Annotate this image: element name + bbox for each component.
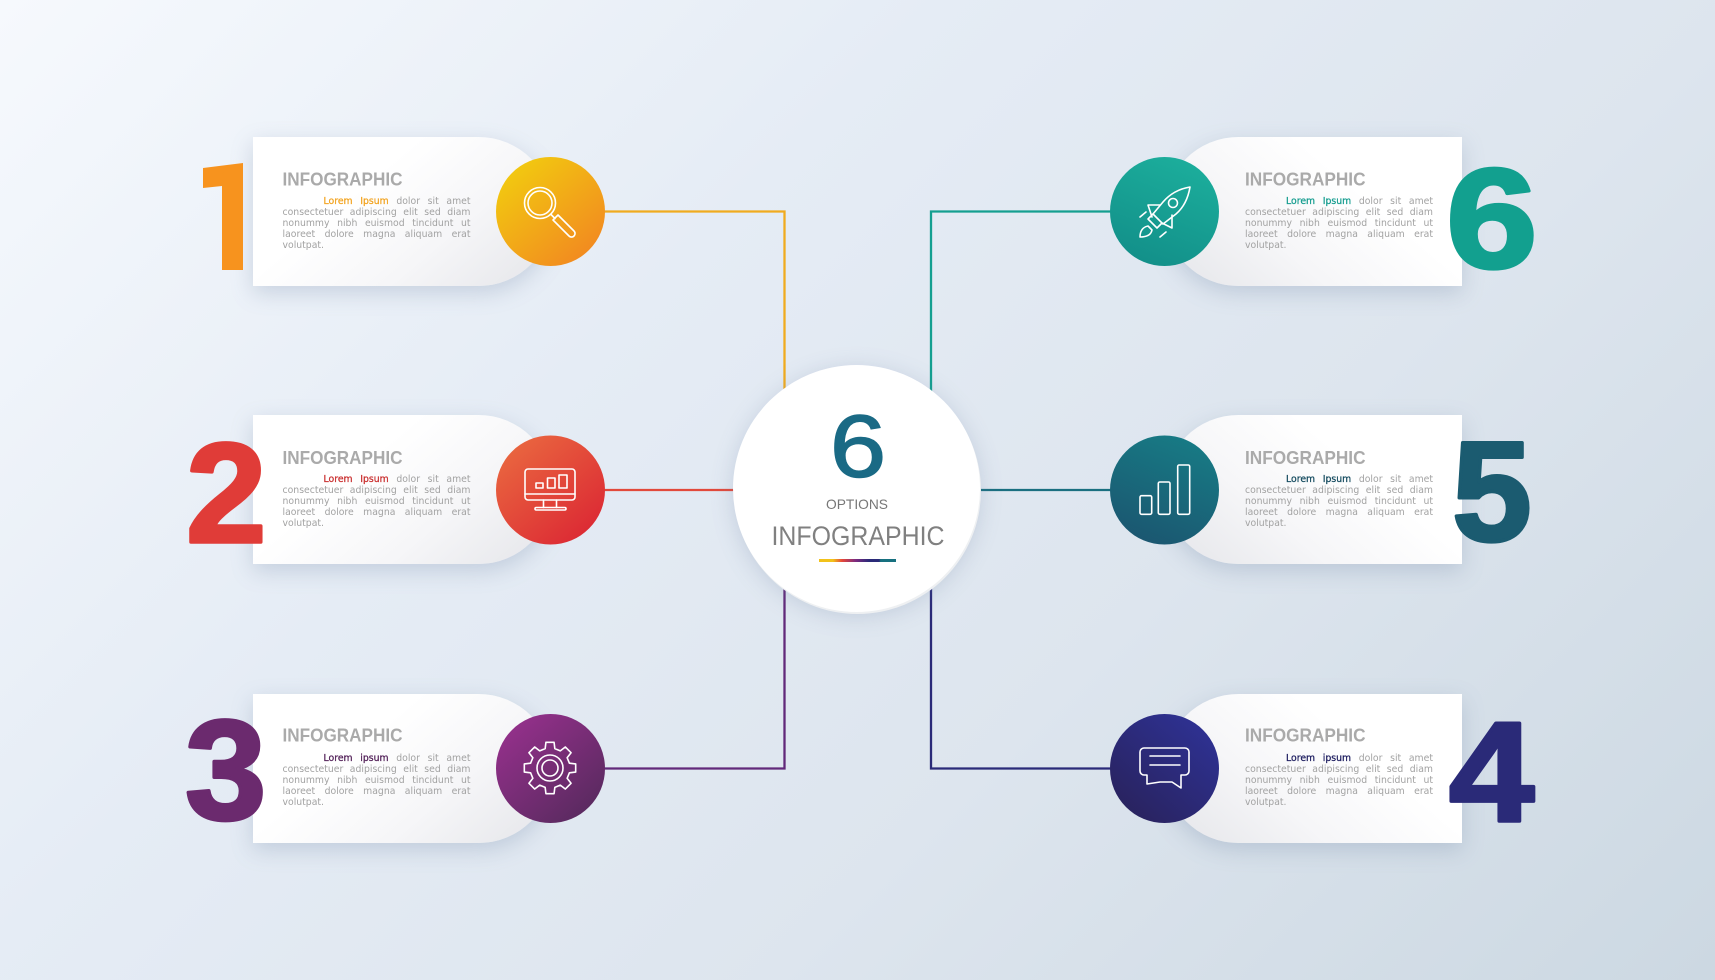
number 1 — [203, 163, 243, 270]
connector 3 — [600, 580, 784, 768]
heading 5: INFOGRAPHIC — [1245, 447, 1366, 468]
icon circle 5 — [1110, 436, 1219, 544]
card 1 — [253, 137, 553, 286]
graphics for option 3 — [185, 691, 605, 850]
body text 6: volutpat. — [1245, 240, 1287, 251]
connector 5 — [975, 489, 1115, 491]
infographic label: INFOGRAPHIC — [772, 521, 944, 551]
big number 6: 6 — [830, 398, 886, 496]
body text 6: Lorem Ipsum dolor sit amet — [1286, 196, 1433, 207]
body text 6 — [1245, 196, 1433, 251]
gradient underline — [819, 559, 896, 562]
number 6: 6 — [1446, 139, 1538, 298]
center circle — [733, 365, 980, 612]
body text 1: laoreet dolore magna aliquam erat — [282, 229, 470, 240]
card 5 — [1164, 415, 1462, 564]
heading 1: INFOGRAPHIC — [282, 168, 402, 190]
panel: option 6 — [1110, 136, 1538, 300]
body text 3: laoreet dolore magna aliquam erat — [282, 786, 470, 797]
body text 2: volutpat. — [282, 518, 324, 529]
icon: monitor chart — [525, 469, 575, 510]
panel: option 3 — [185, 691, 605, 858]
body text 4: Lorem ipsum dolor sit amet — [1286, 753, 1433, 764]
connector 2 — [600, 489, 740, 491]
icon: chat bubbles — [1140, 748, 1189, 788]
connector 1 — [600, 212, 784, 400]
body text 3: volutpat. — [282, 797, 324, 808]
number 1: 1 — [190, 133, 269, 332]
connector 4 — [931, 580, 1115, 768]
body text 6: laoreet dolore magna aliquam erat — [1245, 229, 1433, 240]
heading 2: INFOGRAPHIC — [282, 447, 402, 468]
panel: option 4 — [1110, 693, 1536, 857]
panel: option 5 — [1110, 413, 1532, 578]
icon circle 2 — [496, 436, 605, 544]
icon circle 4 — [1110, 714, 1219, 823]
heading 4: INFOGRAPHIC — [1245, 724, 1366, 746]
center circle text — [772, 398, 944, 562]
body text 2: Lorem Ipsum dolor sit amet — [324, 474, 470, 485]
connector 6 — [931, 212, 1115, 400]
number 5: 5 — [1452, 413, 1532, 571]
body text 4: volutpat. — [1245, 797, 1287, 808]
body text 6: nonummy nibh euismod tincidunt ut — [1245, 218, 1433, 229]
panel: option 2 — [186, 414, 605, 579]
body text 2 — [282, 474, 470, 529]
body text 5: nonummy nibh euismod tincidunt ut — [1245, 496, 1433, 507]
body text 1: nonummy nibh euismod tincidunt ut — [282, 218, 470, 229]
graphics for option 4 — [1110, 693, 1536, 852]
body text 3 — [282, 753, 470, 808]
body text 2: laoreet dolore magna aliquam erat — [282, 507, 470, 518]
body text 1: consectetuer adipiscing elit sed diam — [282, 207, 470, 218]
body text 2: consectetuer adipiscing elit sed diam — [282, 485, 470, 496]
icon: gear — [524, 742, 576, 794]
body text 4: consectetuer adipiscing elit sed diam — [1245, 764, 1433, 775]
card 3 — [253, 694, 553, 843]
body text 5: laoreet dolore magna aliquam erat — [1245, 507, 1433, 518]
body text 3: consectetuer adipiscing elit sed diam — [282, 764, 470, 775]
graphics for option 5 — [1110, 413, 1532, 571]
number 4: 4 — [1449, 693, 1534, 852]
card 2 — [253, 415, 553, 564]
body text 4: nonummy nibh euismod tincidunt ut — [1245, 775, 1433, 786]
body text 4: laoreet dolore magna aliquam erat — [1245, 786, 1433, 797]
graphics for option 2 — [186, 414, 605, 573]
body text 3: nonummy nibh euismod tincidunt ut — [282, 775, 470, 786]
number 2: 2 — [186, 414, 267, 573]
body text 5: volutpat. — [1245, 518, 1287, 529]
icon: bar chart — [1140, 465, 1190, 514]
card 4 — [1164, 694, 1462, 843]
icon circle 3 — [496, 714, 605, 823]
icon: magnifier — [524, 188, 575, 237]
options label: OPTIONS — [826, 496, 888, 512]
icon: rocket — [1140, 187, 1190, 237]
number 3: 3 — [185, 691, 266, 850]
card 6 — [1164, 137, 1462, 286]
body text 1: volutpat. — [282, 240, 324, 251]
body text 2: nonummy nibh euismod tincidunt ut — [282, 496, 470, 507]
body text 5: consectetuer adipiscing elit sed diam — [1245, 485, 1433, 496]
body text 4 — [1245, 753, 1433, 808]
heading 6: INFOGRAPHIC — [1245, 168, 1366, 190]
graphics for option 6 — [1110, 139, 1538, 298]
icon circle 6 — [1110, 157, 1219, 266]
icon circle 1 — [496, 157, 605, 266]
graphics for option 1 — [203, 157, 605, 270]
body text 6: consectetuer adipiscing elit sed diam — [1245, 207, 1433, 218]
panel: option 1 — [203, 135, 605, 301]
body text 1 — [282, 196, 470, 251]
body text 1: Lorem Ipsum dolor sit amet — [324, 196, 470, 207]
body text 5: Lorem Ipsum dolor sit amet — [1286, 474, 1433, 485]
body text 3: Lorem ipsum dolor sit amet — [324, 753, 470, 764]
heading 3: INFOGRAPHIC — [282, 724, 402, 746]
body text 5 — [1245, 474, 1433, 529]
